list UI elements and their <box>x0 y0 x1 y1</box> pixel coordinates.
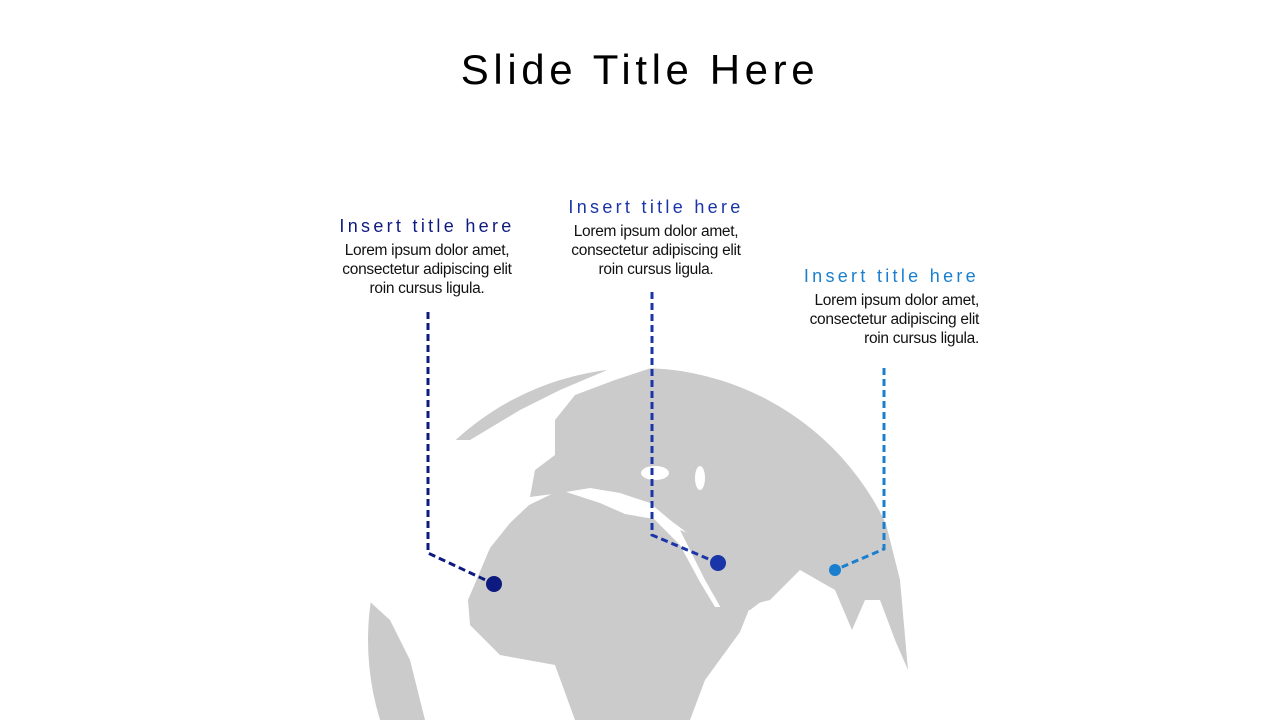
callout: right: Lorem ipsum dolor amet, <box>814 292 979 309</box>
callout: right: consectetur adipiscing elit <box>810 311 979 328</box>
land: eurasia <box>530 365 908 670</box>
land: africa <box>468 490 750 720</box>
connector lines <box>428 292 884 584</box>
callout: right: roin cursus ligula. <box>864 330 979 347</box>
land: greenland/north america <box>456 370 607 440</box>
callout: middle <box>568 197 744 278</box>
callout: left: consectetur adipiscing elit <box>342 261 512 278</box>
callout: left: Lorem ipsum dolor amet, <box>345 242 509 259</box>
callout: left <box>339 216 515 297</box>
callout: right: Insert title here <box>804 266 979 286</box>
callout: middle: Insert title here <box>568 197 744 217</box>
callout: middle: Lorem ipsum dolor amet, <box>574 223 738 240</box>
marker dots <box>486 555 841 592</box>
callout: middle: consectetur adipiscing elit <box>571 242 741 259</box>
land: south america <box>368 600 425 720</box>
land: arabia <box>680 530 760 610</box>
globe map <box>368 292 908 720</box>
callout: left: Insert title here <box>339 216 515 236</box>
title: Slide Title Here <box>461 46 819 93</box>
callout: left: roin cursus ligula. <box>370 280 484 297</box>
callout: right <box>804 266 980 347</box>
callout: middle: roin cursus ligula. <box>599 261 713 278</box>
